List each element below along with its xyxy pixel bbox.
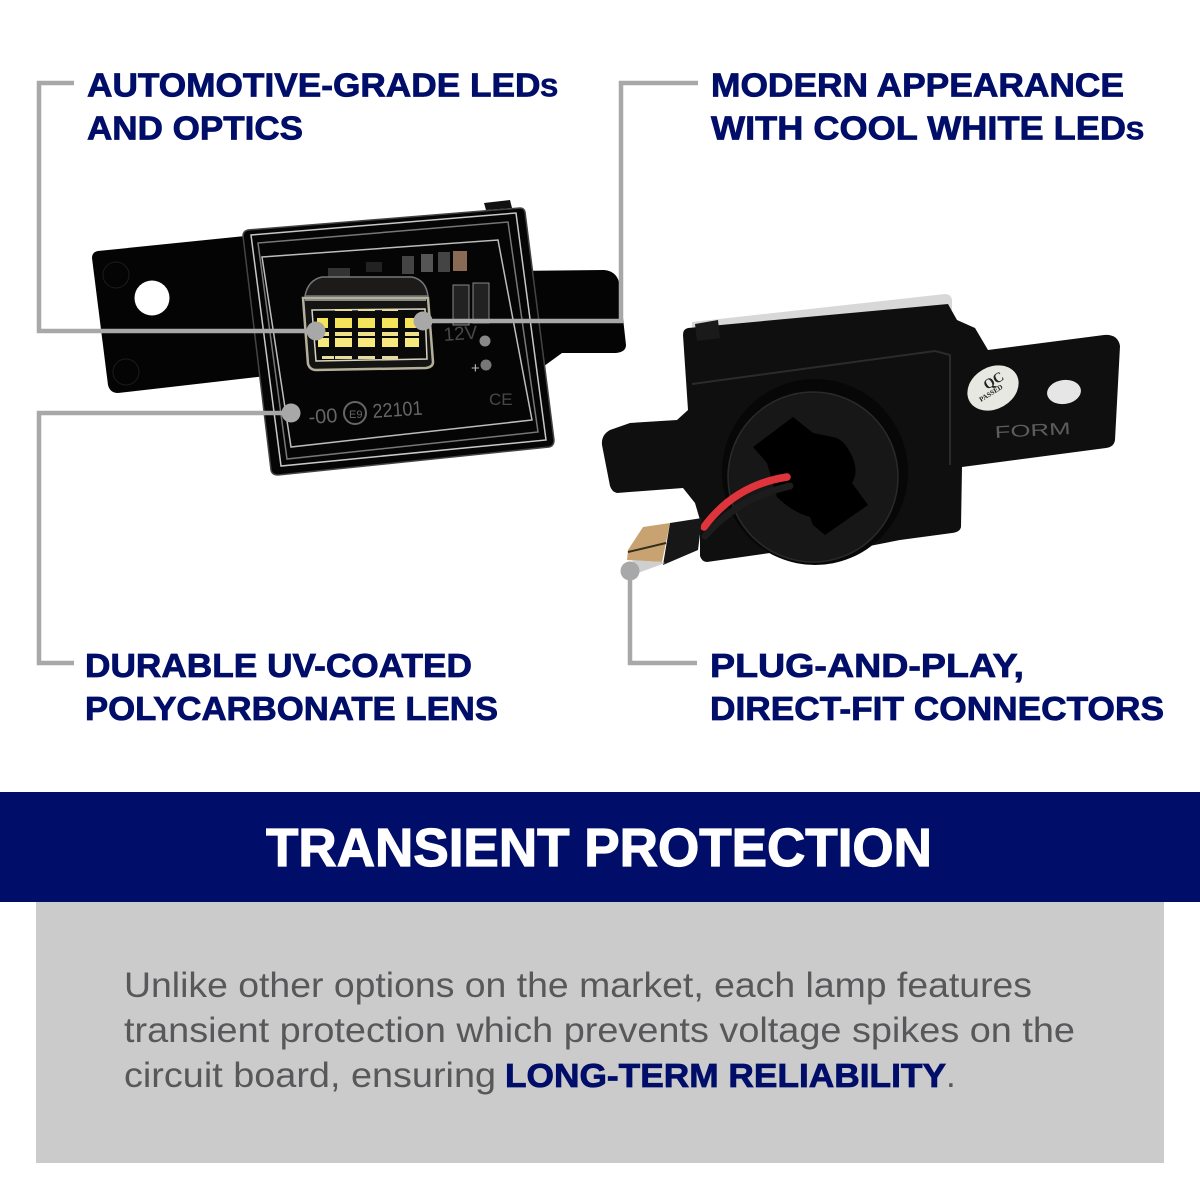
white lens strip along top xyxy=(692,294,952,334)
lamp body with tabs xyxy=(602,304,1120,562)
panel: description: transient protection which prevents voltage spikes on the xyxy=(124,1011,1075,1050)
connector sleeve xyxy=(663,518,702,565)
callout: durable lens: DURABLE UV-COATED xyxy=(85,648,472,685)
circuit board components: 22101 xyxy=(372,398,423,423)
callout: plug-and-play connectors xyxy=(620,562,1164,728)
callout: modern appearance: MODERN APPEARANCE xyxy=(711,68,1124,104)
circuit board components: + xyxy=(471,360,480,377)
callout: plug-and-play connectors: PLUG-AND-PLAY, xyxy=(710,648,1024,685)
socket opening xyxy=(753,417,868,535)
connector contacts xyxy=(627,523,670,573)
QC passed sticker: PASSED xyxy=(978,383,1004,404)
circuit board components: CE xyxy=(489,390,513,409)
banner: transient protection: TRANSIENT PROTECTION xyxy=(266,818,932,878)
panel: description xyxy=(36,902,1164,1163)
product: front of lamp with lens and LEDs xyxy=(92,200,626,475)
callout: modern appearance xyxy=(414,68,1144,330)
callout: plug-and-play connectors: DIRECT-FIT CONNECTORS xyxy=(710,691,1164,728)
mounting hole xyxy=(1045,378,1083,406)
callout: automotive-grade LEDs: AND OPTICS xyxy=(87,110,303,148)
product: back of lamp with socket and connector xyxy=(602,294,1120,573)
circuit board components xyxy=(308,251,513,429)
socket ring xyxy=(722,379,908,565)
circuit board components: 12V xyxy=(443,323,478,346)
wires xyxy=(704,477,790,536)
left mounting bracket xyxy=(92,233,275,393)
right mounting tab xyxy=(510,270,626,369)
LED module xyxy=(303,277,433,370)
callout: durable lens xyxy=(39,404,498,728)
FORM logo: FORM xyxy=(994,419,1071,442)
QC passed sticker xyxy=(959,356,1027,420)
lens housing xyxy=(243,200,554,475)
top clip xyxy=(695,320,720,341)
callout: automotive-grade LEDs: AUTOMOTIVE-GRADE LED S xyxy=(87,68,558,104)
callout: automotive-grade LEDs xyxy=(39,68,558,340)
panel: description: LONG-TERM RELIABILITY xyxy=(505,1058,946,1095)
body ridge highlight xyxy=(692,351,950,465)
panel: description: . xyxy=(946,1056,956,1095)
callout: durable lens: POLYCARBONATE LENS xyxy=(85,691,498,728)
banner: transient protection xyxy=(0,792,1200,902)
QC passed sticker: QC xyxy=(981,370,1007,393)
panel: description: Unlike other options on the market, each lamp features xyxy=(124,966,1032,1005)
circuit board components: E9 xyxy=(349,409,362,421)
circuit board components: -00 xyxy=(308,405,338,429)
panel: description: circuit board, ensuring xyxy=(124,1056,496,1095)
callout: modern appearance: WITH COOL WHITE LED S xyxy=(711,110,1144,148)
